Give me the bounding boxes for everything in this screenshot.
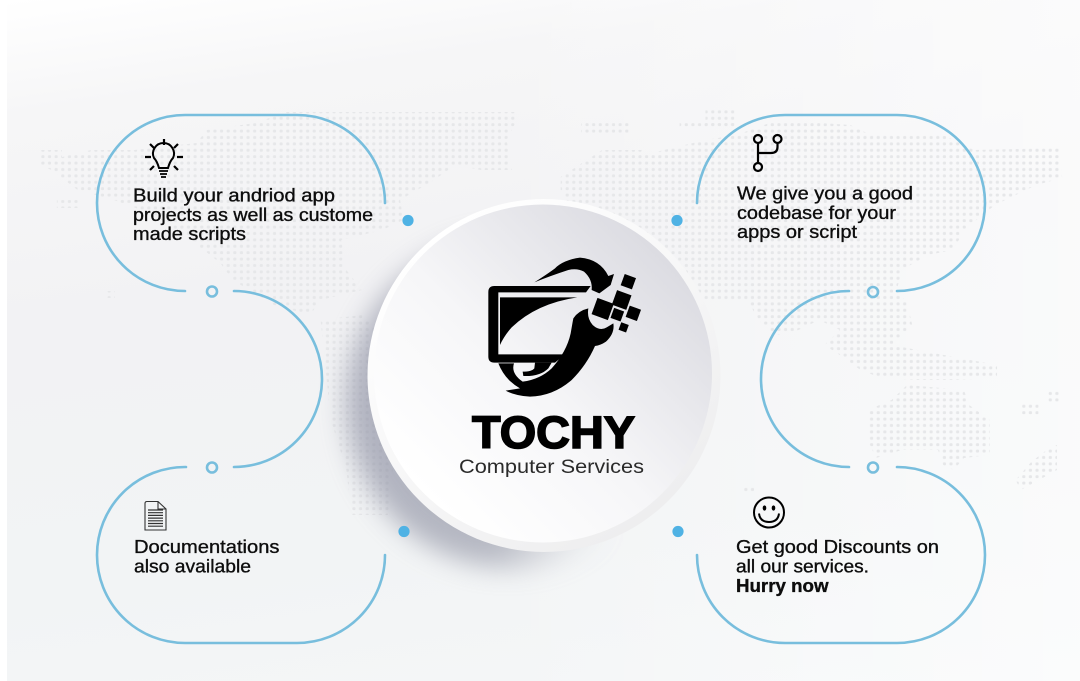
connector node bottom (868, 462, 878, 472)
center badge (346, 199, 720, 568)
icon: smiley (754, 498, 784, 528)
wrench swoosh (498, 308, 614, 397)
panel: documentation (97, 467, 410, 643)
connector node top (207, 286, 217, 296)
icon: document (145, 502, 166, 530)
panel: discounts (672, 467, 985, 643)
text (737, 182, 913, 242)
badge face (374, 204, 712, 542)
connector node bottom (207, 462, 217, 472)
text (133, 184, 373, 244)
text: apps or script (737, 221, 857, 242)
arrow swoosh (534, 258, 614, 293)
text (134, 536, 280, 576)
text: also available (134, 556, 251, 576)
marker dot (398, 526, 410, 537)
monitor stand (523, 363, 552, 376)
panel: android projects (97, 115, 414, 291)
text (736, 536, 939, 596)
pixel squares (592, 274, 641, 332)
text: Build your andriod app (133, 184, 335, 206)
badge rim (368, 199, 720, 552)
brand subtitle: Computer Services (459, 456, 644, 478)
outline (697, 115, 985, 291)
dotted world map (38, 110, 1062, 515)
icon: code branch (754, 135, 782, 171)
icon: light bulb (145, 139, 183, 177)
marker dot (402, 215, 414, 226)
brand name: TOCHY (472, 407, 635, 458)
text: Get good Discounts on (736, 536, 939, 557)
text: projects as well as custome (133, 204, 373, 225)
marker dot (671, 215, 683, 226)
text: Documentations (134, 536, 280, 557)
right connector (761, 287, 878, 472)
panel: codebase (671, 115, 985, 291)
text: Hurry now (736, 575, 829, 596)
badge shadow (346, 236, 678, 568)
outline (97, 115, 385, 291)
outline (697, 467, 985, 643)
text: codebase for your (737, 202, 896, 223)
marker dot (672, 526, 684, 537)
monitor screen highlight (500, 297, 577, 345)
monitor frame (488, 286, 591, 363)
outline (97, 467, 385, 643)
text: all our services. (736, 556, 869, 576)
logo mark (488, 258, 641, 397)
text: We give you a good (737, 182, 913, 204)
left connector (207, 286, 322, 472)
connector node top (868, 287, 878, 297)
text: made scripts (133, 223, 246, 244)
